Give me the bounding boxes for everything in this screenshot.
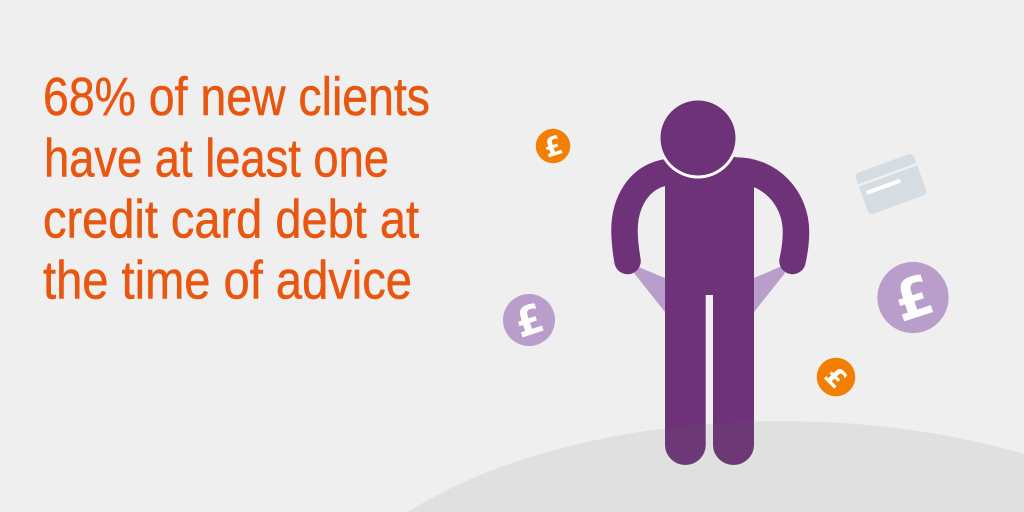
headline: the time of advice	[43, 250, 412, 310]
headline: credit card debt at	[43, 190, 419, 250]
body and legs	[665, 157, 754, 465]
head	[660, 100, 736, 176]
headline: 68% of new clients	[43, 67, 430, 127]
neck gap	[658, 98, 738, 178]
pocket: right	[754, 266, 785, 312]
neck gap top mask	[655, 90, 741, 158]
icon: credit card	[854, 153, 928, 215]
coin: large purple pound right: £	[885, 262, 941, 335]
ground hill	[408, 421, 1024, 512]
coin: small orange pound top left: £	[540, 130, 567, 164]
pocket: left	[634, 266, 665, 312]
coin: orange pound lower right: £	[818, 361, 852, 395]
coin: purple pound left: £	[509, 295, 550, 348]
headline: have at least one	[44, 128, 389, 188]
arm: left	[624, 172, 668, 261]
arm: right	[735, 170, 796, 261]
figure: person with empty pockets	[624, 90, 796, 465]
headline	[43, 67, 430, 310]
